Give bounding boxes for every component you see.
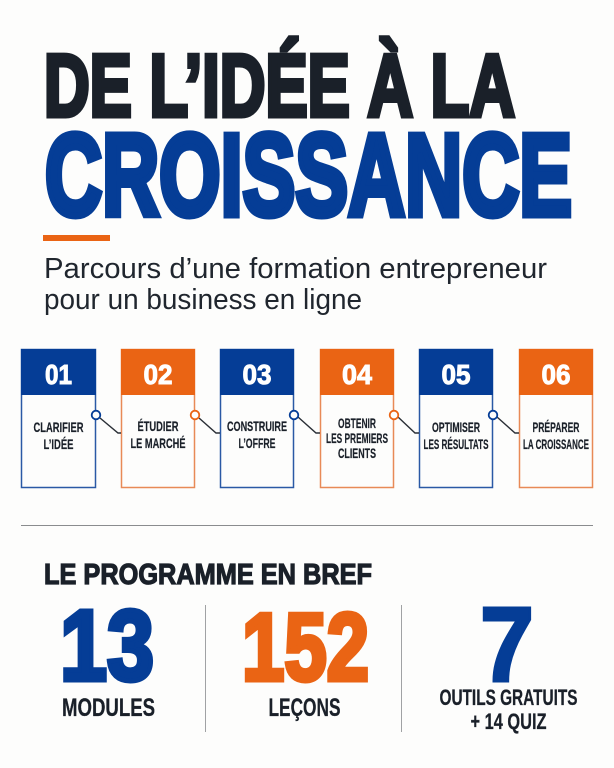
step 04: obtenir les premiers clients — [320, 349, 394, 488]
step 02: étudier le marché: 02 — [144, 359, 172, 390]
step 04: obtenir les premiers clients: LES PREMIERS — [326, 430, 388, 446]
connector 03 to 04 — [290, 411, 320, 433]
step 02: étudier le marché — [121, 349, 195, 488]
stat: 152 leçons: 152 — [242, 594, 369, 701]
stat: 13 modules: MODULES — [62, 694, 155, 722]
step 05: optimiser les résultats: 05 — [442, 359, 470, 390]
step 05: optimiser les résultats — [419, 349, 493, 488]
stat: 7 outils gratuits + 14 quiz: 7 — [480, 586, 534, 704]
step 05: optimiser les résultats: LES RÉSULTATS — [424, 436, 488, 452]
step 01: clarifier l'idée — [21, 349, 96, 488]
step 04: obtenir les premiers clients: 04 — [342, 359, 372, 390]
connector 04 to 05 — [390, 411, 419, 433]
step 03: construire l'offre: L’OFFRE — [238, 435, 276, 451]
step 03: construire l'offre — [220, 349, 294, 488]
stat: 13 modules: 13 — [60, 590, 154, 702]
connector 05 to 06 — [489, 411, 519, 433]
step 05: optimiser les résultats: OPTIMISER — [432, 419, 480, 435]
stat: 152 leçons — [242, 594, 369, 722]
subtitle: pour un business en ligne — [44, 284, 362, 316]
step 03: construire l'offre: 03 — [242, 359, 272, 390]
stat: 152 leçons: LEÇONS — [268, 694, 340, 722]
step 02: étudier le marché: LE MARCHÉ — [130, 435, 186, 451]
step 04: obtenir les premiers clients: CLIENTS — [338, 445, 376, 461]
step 04: obtenir les premiers clients: OBTENIR — [338, 415, 376, 431]
step 06: préparer la croissance: 06 — [542, 359, 570, 390]
orange accent rule — [43, 235, 110, 241]
subtitle — [44, 253, 547, 316]
stat: 7 outils gratuits + 14 quiz: + 14 QUIZ — [470, 709, 546, 734]
connector 01 to 02 — [92, 411, 121, 433]
step 01: clarifier l'idée: CLARIFIER — [34, 419, 84, 435]
step 02: étudier le marché: ÉTUDIER — [138, 418, 178, 434]
heading: le programme en bref: LE PROGRAMME EN BREF — [44, 559, 372, 591]
step 06: préparer la croissance — [519, 349, 593, 488]
step 01: clarifier l'idée: L’IDÉE — [44, 436, 74, 452]
subtitle: Parcours d’une formation entrepreneur — [44, 253, 547, 285]
connector 02 to 03 — [191, 411, 220, 433]
step 03: construire l'offre: CONSTRUIRE — [227, 418, 287, 434]
step 06: préparer la croissance: PRÉPARER — [532, 419, 580, 435]
step 01: clarifier l'idée: 01 — [45, 359, 72, 390]
stat: 7 outils gratuits + 14 quiz — [440, 586, 578, 734]
